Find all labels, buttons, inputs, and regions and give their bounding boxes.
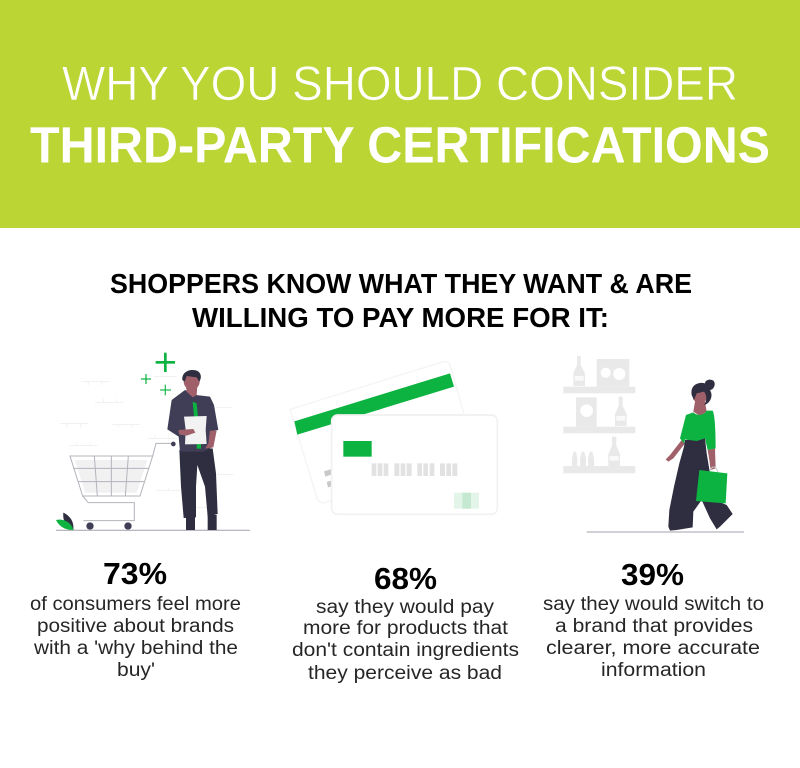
stat column 3: clearer, more accurate <box>546 638 760 659</box>
subheading <box>110 268 692 333</box>
bottles and boxes <box>573 356 585 386</box>
illustration: credit cards <box>290 361 497 514</box>
background bricks <box>60 377 233 508</box>
stat column 1: positive about brands <box>37 616 234 637</box>
plant leaves <box>63 513 73 530</box>
plus signs <box>141 353 175 395</box>
title line 1: WHY YOU SHOULD CONSIDER <box>62 58 738 111</box>
stat column 1: buy' <box>117 660 155 681</box>
title line 2: THIRD-PARTY CERTIFICATIONS <box>30 116 770 174</box>
stat column 2: they perceive as bad <box>308 663 502 684</box>
ground line <box>56 530 250 531</box>
stat column 3: a brand that provides <box>555 616 753 637</box>
shelves <box>563 356 635 473</box>
stat column 1: of consumers feel more <box>30 594 241 615</box>
subheading: SHOPPERS KNOW WHAT THEY WANT & ARE <box>110 268 692 299</box>
illustration: woman with shopping bag <box>563 356 744 533</box>
stat column 2 <box>292 561 519 684</box>
subheading: WILLING TO PAY MORE FOR IT: <box>192 302 609 333</box>
header banner <box>0 0 800 228</box>
stat column 3: say they would switch to <box>543 594 764 615</box>
ground line <box>587 531 744 533</box>
stat column 1: with a 'why behind the <box>33 638 238 659</box>
back card <box>290 361 464 503</box>
stat column 3: 39% <box>621 557 684 592</box>
man <box>186 515 217 530</box>
front card <box>332 415 497 514</box>
stat column 3: information <box>601 660 706 681</box>
stat column 2: more for products that <box>303 618 509 639</box>
stat column 3 <box>543 557 764 681</box>
cart <box>70 443 173 521</box>
stat column 2: say they would pay <box>316 597 494 618</box>
stat column 2: don't contain ingredients <box>292 640 519 661</box>
stat column 1 <box>30 556 241 681</box>
shopping bag <box>710 467 718 472</box>
stat column 1: 73% <box>103 556 167 591</box>
figure <box>666 440 685 462</box>
stat column 2: 68% <box>374 561 437 596</box>
illustration: man with shopping cart <box>56 353 250 531</box>
